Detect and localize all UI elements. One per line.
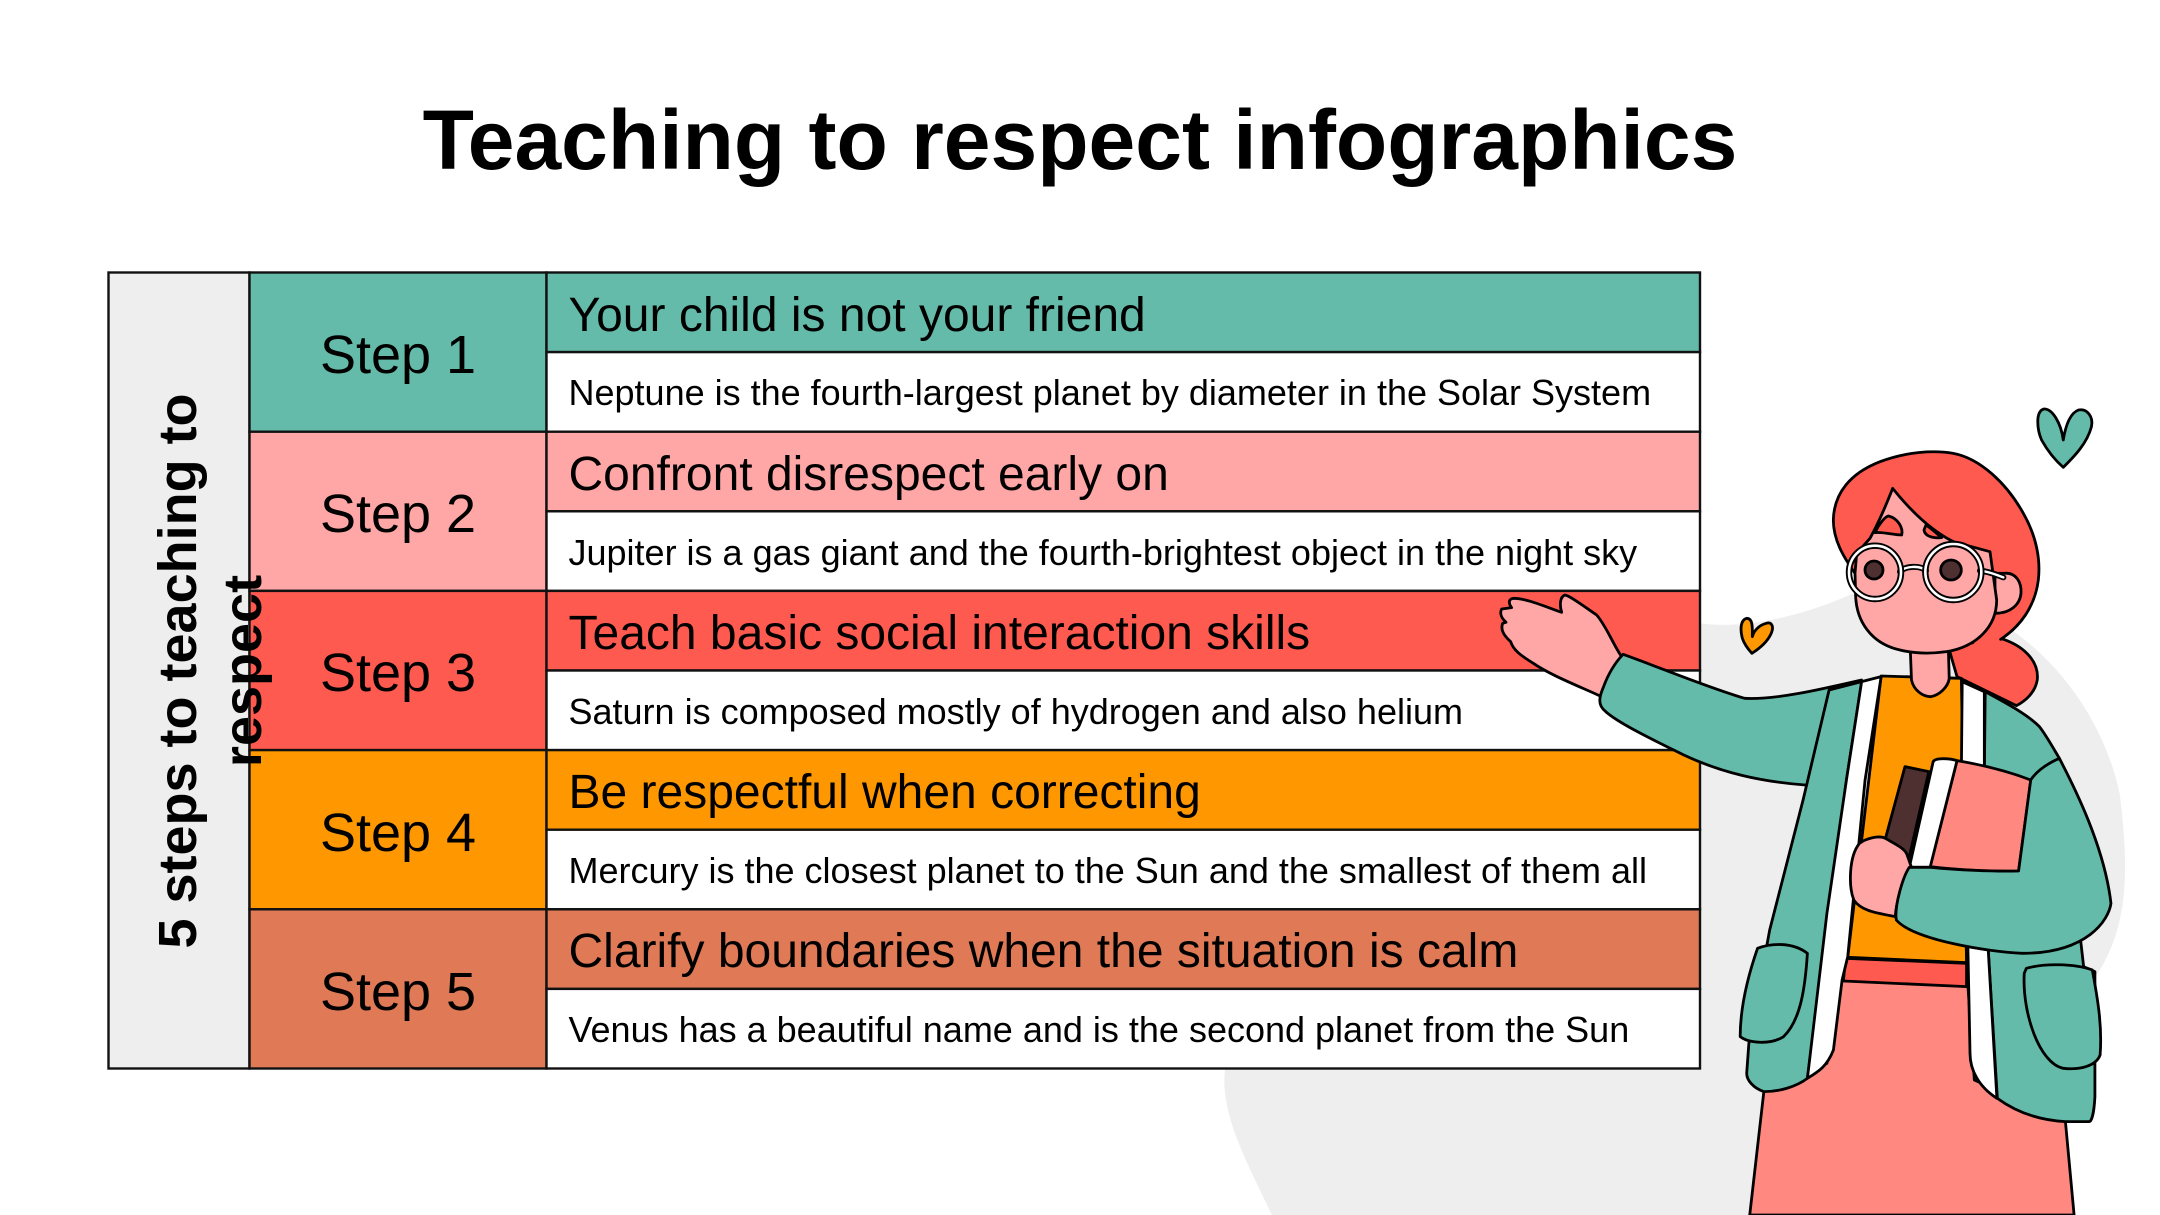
- holding hand: [1850, 837, 1911, 917]
- jacket right trim: [1961, 682, 1984, 773]
- face: [1855, 488, 1997, 653]
- row: step 2: Jupiter is a gas giant and the fourth-brightest object in the night sky: [568, 532, 1637, 573]
- hair outline: [1833, 452, 2039, 639]
- row: step 5: [250, 909, 1700, 1068]
- pointing hand: [1501, 595, 1622, 697]
- skirt: [1750, 980, 2074, 1215]
- row: step 4: Mercury is the closest planet to the Sun and the smallest of them all: [568, 850, 1647, 891]
- side label text: [148, 393, 273, 949]
- shirt: [1848, 676, 1967, 963]
- row: step 1: Your child is not your friend: [568, 289, 1146, 342]
- row: step 2: Confront disrespect early on: [568, 448, 1169, 501]
- row: step 3: [250, 591, 1700, 750]
- brown book: [1885, 767, 1929, 857]
- right eye: [1941, 560, 1961, 580]
- row: step 5: Clarify boundaries when the situation is calm: [568, 925, 1518, 978]
- pointing sleeve: [1600, 654, 1862, 787]
- ear: [1995, 573, 2021, 613]
- side label text: 5 steps to teaching to: [148, 393, 208, 949]
- row: step 3: Saturn is composed mostly of hydrogen and also helium: [568, 691, 1463, 732]
- row: step 1: Neptune is the fourth-largest planet by diameter in the Solar System: [568, 372, 1651, 413]
- body and clothes: [1600, 409, 2111, 1215]
- title: Teaching to respect infographics: [423, 93, 1737, 187]
- row: step 3: Teach basic social interaction skills: [568, 607, 1310, 660]
- row: step 3: Step 3: [320, 643, 476, 703]
- hair fill: [1833, 452, 2039, 653]
- jacket right panel: [1984, 692, 2095, 1122]
- jacket right lower trim: [1968, 947, 1997, 1098]
- belt: [1843, 958, 1967, 987]
- pink book: [1930, 761, 2031, 871]
- book spine: [1909, 759, 1957, 867]
- row: step 4: Step 4: [320, 803, 476, 863]
- ponytail: [1948, 638, 2037, 706]
- right pocket: [2024, 965, 2101, 1069]
- head: [1833, 452, 2039, 653]
- left eye: [1865, 561, 1883, 579]
- right eyebrow: [1924, 525, 1942, 538]
- orange heart: [1741, 618, 1773, 653]
- teal heart: [2038, 409, 2092, 467]
- left eyebrow: [1875, 516, 1902, 535]
- row: step 5: Step 5: [320, 962, 476, 1022]
- row: step 4: [250, 750, 1700, 909]
- neck: [1910, 647, 1949, 697]
- side label cell: [108, 272, 250, 1068]
- row: step 4: Be respectful when correcting: [568, 766, 1201, 819]
- row: step 1: Step 1: [320, 325, 476, 385]
- row: step 1: [250, 272, 1700, 432]
- grey background blob: [1224, 593, 2125, 1215]
- panel: steps table: [108, 272, 1700, 1068]
- jacket left trim: [1807, 677, 1881, 1078]
- row: step 5: Venus has a beautiful name and is the second planet from the Sun: [568, 1009, 1629, 1050]
- row: step 2: [250, 432, 1700, 591]
- jacket left panel: [1747, 682, 1862, 1092]
- side label text: respect: [213, 575, 273, 767]
- left pocket: [1740, 945, 1807, 1042]
- right arm: [1896, 758, 2111, 953]
- row: step 2: Step 2: [320, 484, 476, 544]
- illustration: teacher: [1501, 409, 2111, 1215]
- glasses: [1849, 544, 2003, 600]
